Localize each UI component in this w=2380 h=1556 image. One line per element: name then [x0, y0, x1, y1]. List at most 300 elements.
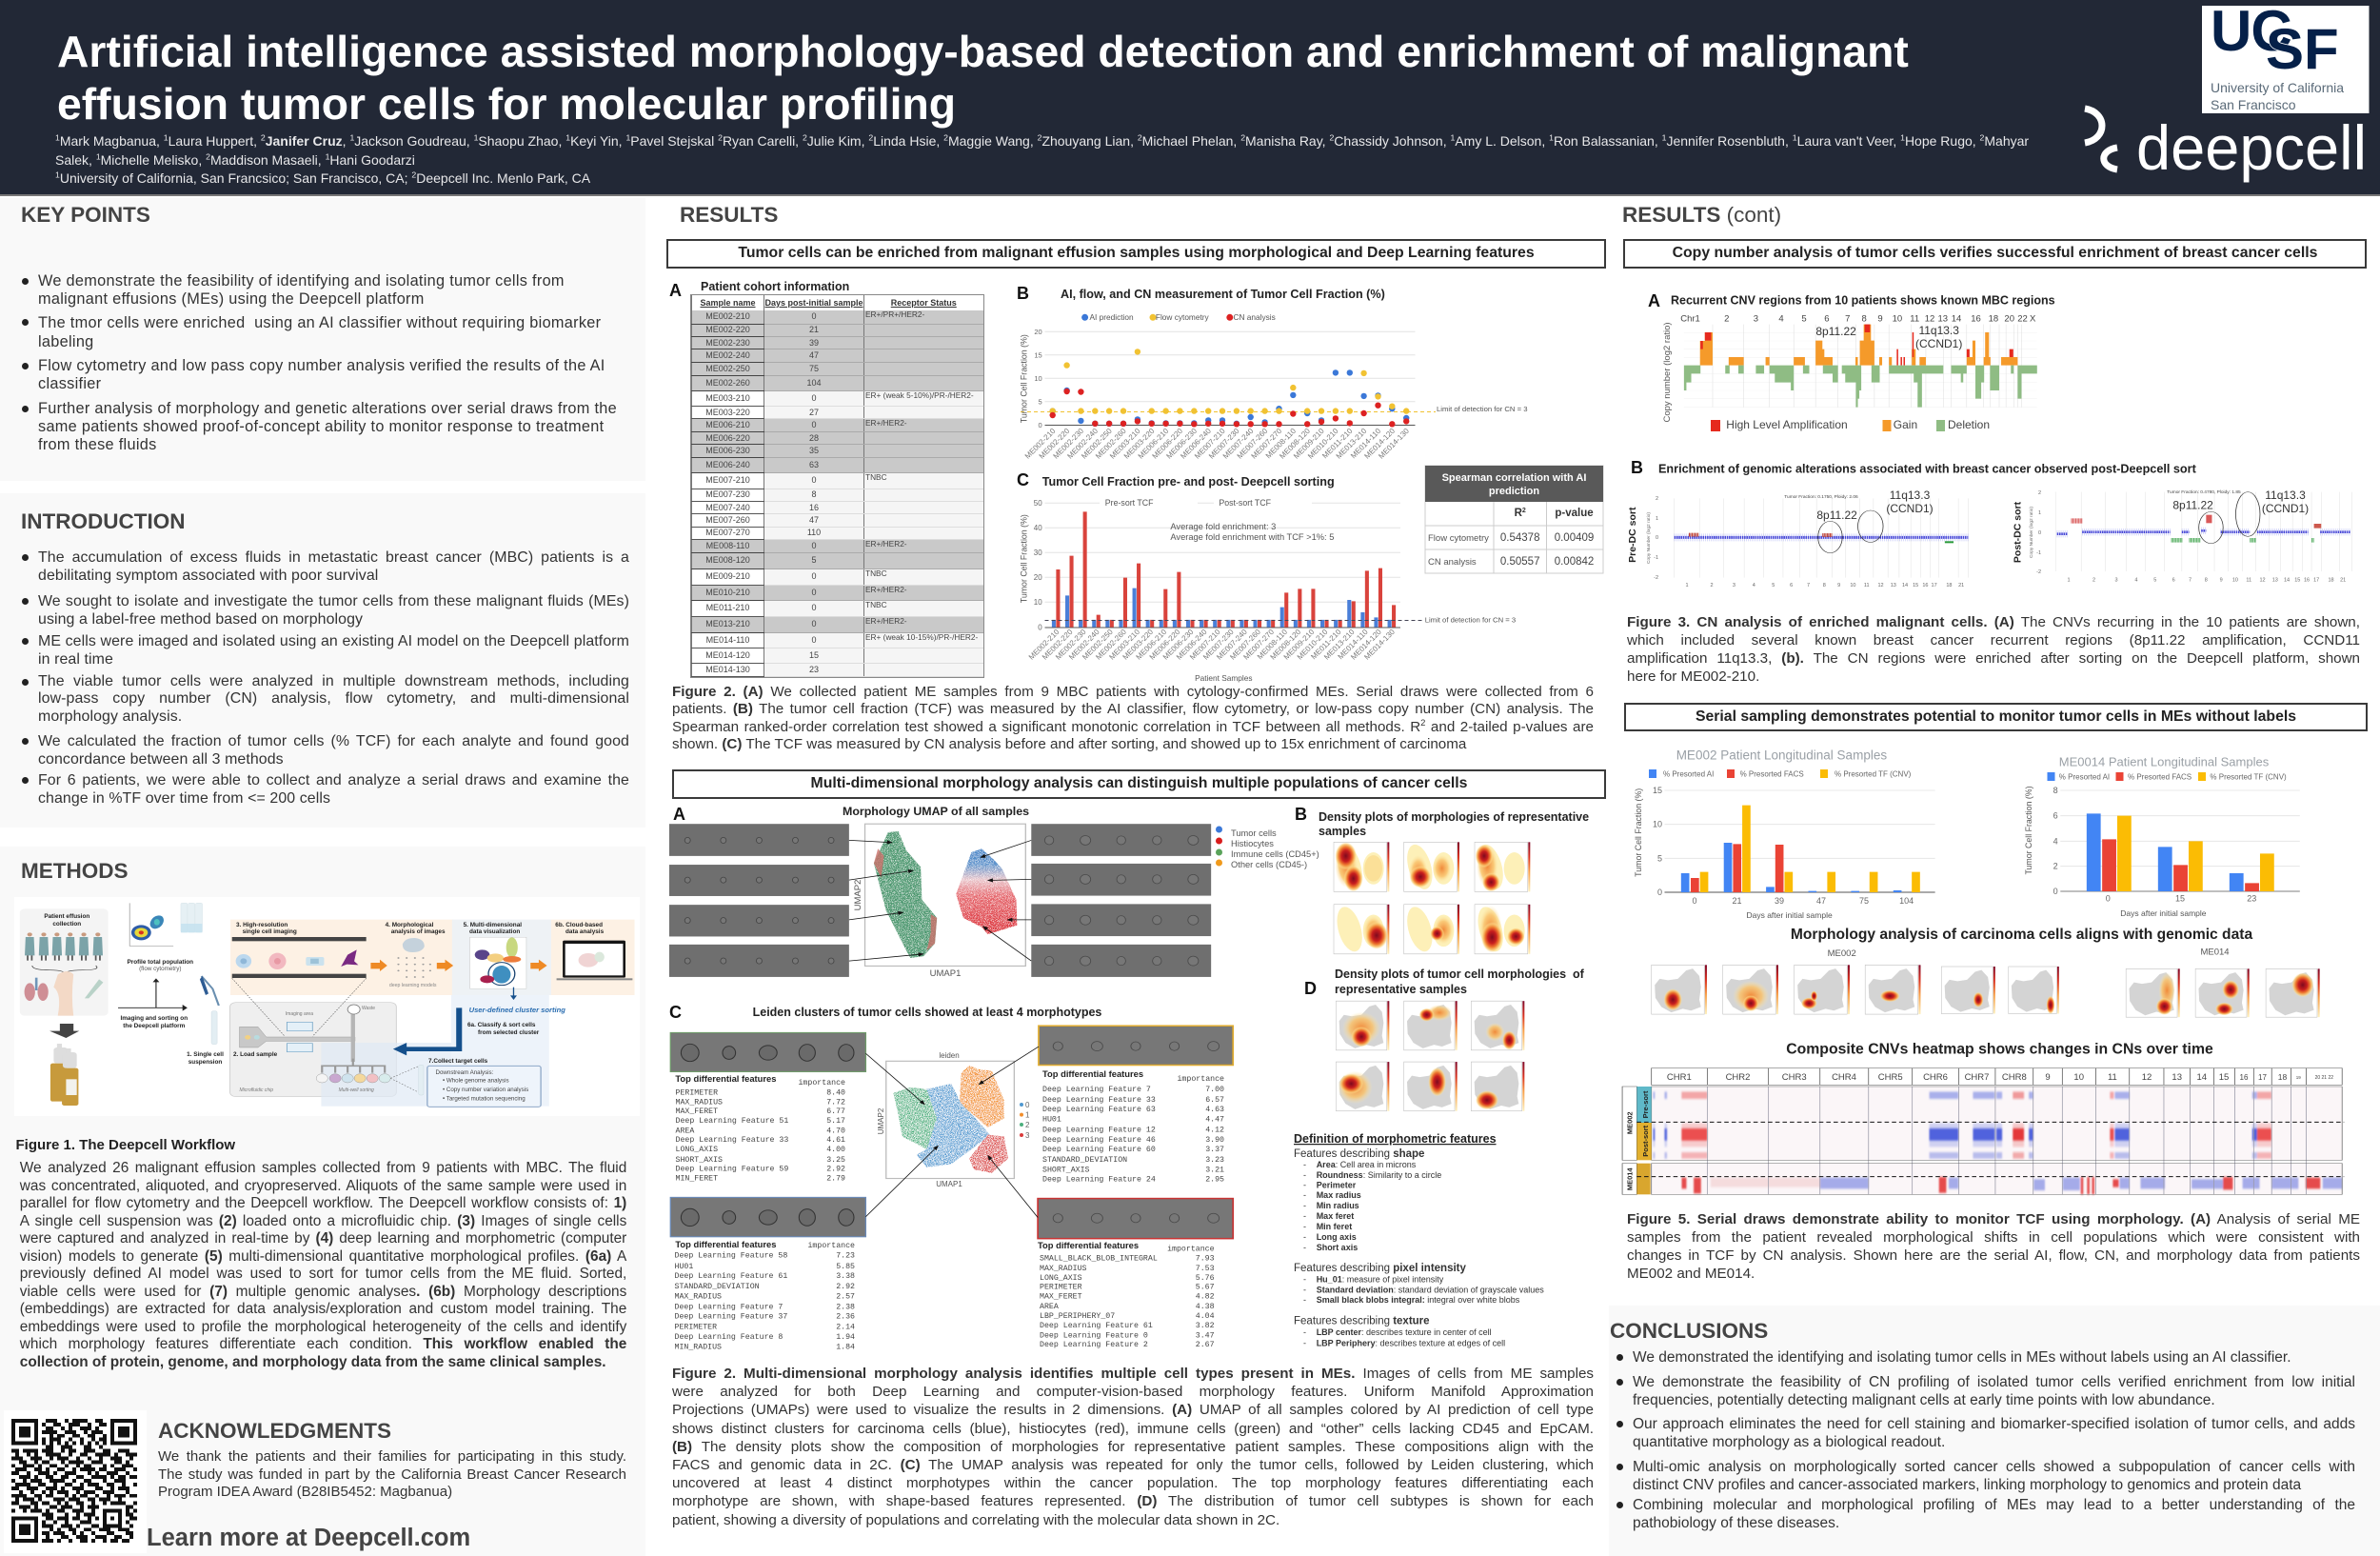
- figure 1: deepcell workflow diagram: 3. High-resolution: [236, 922, 288, 928]
- feature table: yellow morphotype: Deep Learning Feature 63: [1042, 1105, 1156, 1114]
- QR code: [4, 1410, 147, 1553]
- figure 1 caption: We analyzed 26 malignant effusion samples collected from 9 patients with MBC. The fluid: [20, 1160, 626, 1176]
- figure 1: deepcell workflow diagram: analysis of images: [391, 928, 446, 935]
- sample side bars: [1622, 1087, 1652, 1194]
- figure 3-B: pre and post sort copy number plots: [1627, 458, 2351, 588]
- chart: ME002 longitudinal samples: [1634, 748, 1935, 920]
- acknowledgments text: The study was funded in part by the California Breast Cancer Research: [158, 1466, 626, 1482]
- post-DC sort plot: 15: [2294, 577, 2300, 583]
- chart: ME014 longitudinal samples: 2: [2053, 862, 2058, 871]
- table: spearman correlation: Flow cytometry: [1428, 533, 1489, 544]
- heading: methods: METHODS: [21, 859, 128, 883]
- table: patient cohort information: ME003-220: [705, 408, 750, 417]
- chart B: AI, flow and CN scatter: Limit of detection for CN = 3: [1437, 405, 1527, 413]
- chart: ME002 longitudinal samples: 15: [1653, 786, 1662, 795]
- figure 1 caption: parallel for flow cytometry and the Deepcell workflow. The Deepcell workflow consists of: 1): [20, 1195, 626, 1211]
- chart C sample labels: ME002-220: [1041, 628, 1075, 662]
- figure 2-B: density plots of morphologies: Density plots of morphologies of representative: [1319, 810, 1589, 824]
- table: spearman correlation: 0.50557: [1500, 556, 1539, 568]
- heading: results: RESULTS: [680, 203, 778, 227]
- shape features: Min feret: [1317, 1222, 1352, 1231]
- feature table: green morphotype: MAX_RADIUS: [676, 1098, 723, 1107]
- chart C sample labels: ME007-270: [1241, 628, 1276, 662]
- chart B sample labels: ME006-220: [1151, 427, 1185, 461]
- morphology density plots: ME014: ME014: [2200, 947, 2230, 958]
- figure 1: deepcell workflow diagram: • Targeted mutation sequencing: [443, 1095, 526, 1103]
- table: patient cohort information: ME002-240: [705, 350, 750, 360]
- feature table: red morphotype: [1038, 1240, 1215, 1349]
- chromosome labels: Chr1: [1680, 314, 1700, 324]
- figure 1: deepcell workflow diagram: Waste: [362, 1006, 375, 1011]
- chromosome labels: 22: [2017, 314, 2028, 324]
- ME002 legend: % Presorted AI: [1663, 769, 1714, 779]
- table: patient cohort information: ME013-210: [705, 619, 750, 628]
- table: patient cohort information: 0: [811, 475, 817, 485]
- section bar: tumor cell enrichment: [666, 239, 1606, 269]
- chart B sample labels: ME008-120: [1278, 427, 1312, 461]
- chart C: tumor cell fraction pre and post sort: 0: [1038, 623, 1042, 632]
- chromosome labels: 3: [1754, 314, 1758, 324]
- figure 3 caption: which included several known breast cancer recurrent regions (8p11.22 amplification, CCND11: [1627, 632, 2360, 648]
- chart: ME014 longitudinal samples: 6: [2053, 811, 2058, 821]
- chart B sample labels: ME013-210: [1335, 427, 1369, 461]
- key point 1: [38, 272, 638, 309]
- conclusion 2: We demonstrate the feasibility of CN profiling of isolated tumor cells verified enrichment from low initial: [1633, 1373, 2355, 1390]
- post-DC sort plot: 2: [2038, 490, 2041, 496]
- table: patient cohort information: ME002-210: [705, 311, 750, 321]
- legend: cell types: Histiocytes: [1231, 839, 1274, 848]
- pre-DC sort plot: 0: [1656, 535, 1658, 541]
- intro bullet 5: [38, 731, 629, 768]
- feature table: green morphotype: 4.61: [826, 1136, 845, 1145]
- morphology density plots: ME002: ME002: [1828, 948, 1856, 959]
- intro bullet 5: concordance between all 3 methods: [38, 750, 284, 768]
- shape features: -: [1303, 1170, 1306, 1180]
- key point 3: [38, 357, 638, 393]
- table: patient cohort information: ME010-210: [705, 588, 750, 597]
- section bar: tumor cell enrichment: Tumor cells can be enriched from malignant effusion samples using morphological and Deep Learning features: [738, 245, 1535, 261]
- feature table: blue morphotype: [674, 1239, 855, 1352]
- conclusion 3: [1633, 1415, 2355, 1451]
- pre-DC sort plot: 14: [1902, 583, 1908, 588]
- chart: ME002 longitudinal samples: 75: [1859, 896, 1869, 906]
- leiden connector arrows: [865, 1047, 1039, 1217]
- table: patient cohort information: Days post-initial sample: [764, 297, 863, 307]
- figure 2-C: Leiden clusters: Leiden clusters of tumor cells showed at least 4 morphotypes: [753, 1006, 1101, 1019]
- figure 1 caption: collection of protein, genome, and morphology data from the same clinical samples.: [20, 1354, 606, 1369]
- feature table: red morphotype: 4.82: [1196, 1293, 1215, 1302]
- chart B: AI, flow and CN scatter: 5: [1039, 398, 1042, 406]
- feature table: green morphotype: 2.79: [826, 1175, 845, 1183]
- figure 5 caption: changes in TCF by CN analysis. Shown here are the serial AI, flow, CN, and morphology data from patients: [1627, 1247, 2360, 1264]
- feature table: green morphotype: Top differential features: [675, 1073, 776, 1084]
- deletion bars: [1684, 366, 2037, 408]
- chart: ME002 longitudinal samples: Days after initial sample: [1746, 910, 1833, 920]
- feature table: red morphotype: Deep Learning Feature 0: [1040, 1330, 1148, 1340]
- feature table: blue morphotype: Deep Learning Feature 37: [674, 1312, 787, 1322]
- table: patient cohort information: ME007-270: [705, 528, 750, 537]
- chart B sample labels: ME002-220: [1038, 427, 1072, 461]
- chart C: tumor cell fraction pre and post sort: 10: [1034, 598, 1042, 607]
- feature table: green morphotype: Deep Learning Feature 59: [676, 1165, 788, 1174]
- chart B sample labels: ME007-270: [1250, 427, 1284, 461]
- chromosome labels: 5: [1801, 314, 1807, 324]
- pre-DC sort plot: 13: [1891, 583, 1896, 588]
- table: spearman correlation: CN analysis: [1428, 557, 1477, 568]
- pixel intensity features: -: [1303, 1274, 1306, 1284]
- chart C: tumor cell fraction pre and post sort: Average fold enrichment with TCF >1%: 5: [1170, 532, 1334, 542]
- post-DC sort plot: 10: [2232, 577, 2238, 583]
- chart B sample labels: ME009-210: [1292, 427, 1326, 461]
- table: patient cohort information: ME002-230: [705, 338, 750, 348]
- chart: ME014 longitudinal samples: 0: [2053, 887, 2058, 896]
- table: patient cohort information: 47: [809, 515, 819, 525]
- definition of morphometric features: [1294, 1132, 1544, 1348]
- conclusion 5: pathobiology of these diseases.: [1633, 1514, 1839, 1531]
- pre-DC sort plot: 9: [1837, 583, 1840, 588]
- chart C sample labels: ME006-210: [1135, 628, 1169, 662]
- table: patient cohort information: 27: [809, 408, 819, 417]
- feature table: yellow morphotype: Deep Learning Feature 46: [1042, 1135, 1156, 1145]
- feature table: blue morphotype: 2.57: [836, 1293, 855, 1302]
- chromosome labels: 2: [1724, 314, 1729, 324]
- chart C: tumor cell fraction pre and post sort: C: [1017, 470, 1029, 489]
- morphotype strip: yellow: [1039, 1026, 1233, 1066]
- figure 1 caption: viable cells were used for (7) multiple genomic analyses. (6b) Morphology descriptions: [20, 1284, 626, 1299]
- intro bullet 5: We calculated the fraction of tumor cells (% TCF) for each analyte and found good: [38, 733, 629, 748]
- feature table: green morphotype: MIN_FERET: [676, 1175, 718, 1183]
- pixel intensity features: Hu_01: measure of pixel intensity: [1317, 1274, 1444, 1284]
- composite CNV heatmap: 18: [2278, 1072, 2287, 1082]
- chromosome labels: [1680, 314, 2036, 324]
- feature table: yellow morphotype: 3.21: [1205, 1166, 1224, 1175]
- feature table: blue morphotype: Deep Learning Feature 7: [674, 1302, 783, 1311]
- figure 1 title: Figure 1. The Deepcell Workflow: [15, 1137, 235, 1153]
- figure 1: deepcell workflow diagram: Downstream Analysis:: [436, 1069, 494, 1076]
- feature table: yellow morphotype: 3.23: [1205, 1156, 1224, 1165]
- pre-DC sort plot: 15: [1913, 583, 1918, 588]
- table: patient cohort information: 0: [811, 635, 817, 645]
- chart: ME002 longitudinal samples: 39: [1775, 896, 1784, 906]
- ME002 legend: % Presorted TF (CNV): [1835, 769, 1912, 779]
- chart B sample labels: ME002-250: [1080, 427, 1114, 461]
- figure 1 caption: previously defined AI model was used to sort for tumor cells from the ME fluid. Sorted,: [20, 1266, 626, 1282]
- chart C sample labels: ME013-210: [1322, 628, 1357, 662]
- texture features: -: [1303, 1327, 1306, 1337]
- section bar: copy number analysis: Copy number analysis of tumor cells verifies successful enrichment of breast cancer cells: [1673, 245, 2317, 261]
- table: patient cohort information: 0: [811, 393, 817, 403]
- figure 1 caption: were captured and analyzed in real-time by (4) deep learning and morphometric (computer: [20, 1230, 626, 1247]
- post-DC sort plot: Tumor Fraction: 0.4780, Ploidy: 1.85: [2167, 489, 2241, 495]
- multi-dimensional figure caption: Projections (UMAPs) were used to visualize the results in 2 dimensions. (A) UMAP of all samples colored by AI prediction of cell type: [672, 1402, 1594, 1418]
- figure 2 caption: patients. (B) The tumor cell fraction (TCF) was measured by the AI classifier, flow cytometry, or low-pass copy number (CN) analysis. The: [672, 701, 1594, 717]
- chart: ME014 longitudinal samples: 23: [2247, 893, 2256, 903]
- acknowledgments text: [158, 1448, 626, 1500]
- figure 2-C: Leiden clusters: leiden: [939, 1051, 960, 1060]
- leiden legend: 1: [1025, 1110, 1030, 1120]
- table: spearman correlation: Spearman correlation with AI: [1442, 472, 1586, 484]
- shape features: Features describing shape: [1294, 1148, 1424, 1160]
- feature table: red morphotype: MAX_RADIUS: [1040, 1265, 1087, 1273]
- chart C sample labels: ME002-240: [1067, 628, 1101, 662]
- logo: deepcell: deepcell: [2136, 112, 2367, 183]
- table: spearman correlation: 0.54378: [1500, 532, 1539, 544]
- CNV legend: Gain: [1894, 418, 1917, 431]
- shape features: Min radius: [1317, 1201, 1359, 1210]
- figure 2-A: morphology UMAP of all samples: Morphology UMAP of all samples: [843, 805, 1029, 818]
- intro bullet 6: change in %TF over time from <= 200 cells: [38, 790, 330, 806]
- post-DC sort plot: 14: [2284, 577, 2290, 583]
- pixel intensity features: -: [1303, 1286, 1306, 1295]
- table: patient cohort information: ME014-110: [706, 635, 749, 645]
- feature table: red morphotype: 4.38: [1196, 1303, 1215, 1311]
- key point 2: labeling: [38, 333, 94, 350]
- pre-DC sort plot: 8: [1823, 583, 1826, 588]
- pre-DC sort plot: 8p11.22: [1816, 509, 1857, 522]
- figure 2-A: morphology UMAP of all samples: UMAP2: [853, 880, 863, 910]
- table: patient cohort information: 75: [809, 364, 819, 373]
- figure 2A heading: A: [669, 281, 682, 300]
- pre-DC sort plot: 7: [1807, 583, 1810, 588]
- post-DC sort plot: (CCND1): [2262, 502, 2309, 515]
- leiden legend: 2: [1025, 1121, 1030, 1129]
- chart C: tumor cell fraction pre and post sort: 20: [1034, 573, 1042, 582]
- legend: cell types: Other cells (CD45-): [1231, 860, 1307, 869]
- heading: composite CNV heatmap: Composite CNVs heatmap shows changes in CNs over time: [1786, 1042, 2213, 1057]
- chart B sample labels: ME011-210: [1320, 427, 1355, 460]
- table: patient cohort information: ME002-220: [705, 325, 750, 334]
- chromosome labels: 7: [1845, 314, 1850, 324]
- table: patient cohort information: ME007-260: [705, 515, 750, 525]
- feature table: green morphotype: importance: [798, 1078, 845, 1087]
- post-DC sort plot: 4: [2134, 577, 2137, 583]
- pre-DC sort plot: 11: [1864, 583, 1870, 588]
- pre-DC sort plot: 5: [1772, 583, 1775, 588]
- chart B: AI, flow and CN scatter: 10: [1034, 374, 1042, 383]
- figure 1 caption: [19, 1160, 626, 1369]
- pre-DC sort plot: 2: [1656, 496, 1658, 502]
- figure 3-A: recurrent CNV regions: 11q13.3: [1918, 324, 1959, 337]
- figure 1 caption: was concentrated, aliquoted, and cryopreserved. Aliquots of the same sample were used in: [20, 1177, 626, 1194]
- feature table: blue morphotype: 2.14: [836, 1324, 855, 1331]
- shape features: Area: Cell area in microns: [1317, 1160, 1417, 1169]
- shape features: -: [1303, 1181, 1306, 1190]
- composite CNV heatmap: CHR2: [1726, 1072, 1750, 1083]
- chart B sample labels: ME014-130: [1377, 427, 1411, 461]
- chart B sample labels: ME002-210: [1023, 427, 1058, 461]
- table: patient cohort information: ME002-250: [705, 364, 750, 373]
- feature table: yellow morphotype: 7.00: [1205, 1086, 1224, 1094]
- CN analysis points: [1049, 389, 1409, 427]
- composite CNV heatmap: ME014: [1626, 1167, 1634, 1190]
- CNV legend: Deletion: [1948, 418, 1990, 431]
- title: [57, 27, 1909, 129]
- morphotype strip: red: [1038, 1199, 1233, 1239]
- pixel intensity features: Small black blobs integral: integral over white blobs: [1317, 1295, 1520, 1305]
- chart B: AI, flow and CN scatter: 0: [1039, 421, 1042, 429]
- figure 5 caption: ME002 and ME014.: [1627, 1266, 1755, 1282]
- chromosome header row: [1652, 1068, 2342, 1085]
- chromosome labels: 9: [1877, 314, 1883, 324]
- section bar: multi-dimensional morphology: Multi-dimensional morphology analysis can distinguish multiple populations of cancer cells: [811, 775, 1467, 791]
- chart C: tumor cell fraction pre and post sort: 50: [1034, 499, 1042, 508]
- title: Artificial intelligence assisted morphology-based detection and enrichment of malignant: [57, 27, 1909, 76]
- chart: ME014 longitudinal samples: 8: [2053, 786, 2058, 795]
- feature table: red morphotype: MAX_FERET: [1040, 1293, 1082, 1302]
- figure 2 caption: Spearman ranked-order correlation test showed a significant monotonic correlation in TCF between all methods. R2 and 2-tailed p-values are: [672, 716, 1594, 735]
- feature table: blue morphotype: Deep Learning Feature 61: [674, 1271, 787, 1281]
- conclusion 3: quantitative morphology as a biological readout.: [1633, 1434, 1945, 1449]
- feature table: yellow morphotype: STANDARD_DEVIATION: [1042, 1156, 1127, 1165]
- figure 2-C: Leiden clusters: C: [669, 1003, 682, 1022]
- ME002 legend: % Presorted FACS: [1740, 769, 1804, 779]
- feature table: yellow morphotype: [1042, 1068, 1224, 1185]
- shape features: Max feret: [1317, 1211, 1354, 1221]
- post-DC sort plot: 2: [2092, 577, 2095, 583]
- feature table: green morphotype: 8.40: [826, 1089, 845, 1097]
- shape features: -: [1303, 1160, 1306, 1169]
- ME014 legend: % Presorted AI: [2059, 773, 2110, 781]
- right cell image strips: [1031, 824, 1211, 977]
- composite CNV heatmap: CHR4: [1832, 1072, 1856, 1083]
- shape features: -: [1303, 1190, 1306, 1200]
- table: patient cohort information: ME008-110: [706, 541, 749, 550]
- figure 3-A: recurrent CNV regions: A: [1648, 291, 1660, 310]
- feature table: blue morphotype: 7.23: [836, 1252, 855, 1261]
- composite CNV heatmap: [1622, 1068, 2344, 1194]
- chart: ME002 longitudinal samples: 104: [1899, 896, 1914, 906]
- heading: acknowledgments: ACKNOWLEDGMENTS: [158, 1419, 391, 1442]
- shape features: Short axis: [1317, 1243, 1358, 1252]
- feature table: blue morphotype: 1.94: [836, 1333, 855, 1342]
- legend: cell types: Immune cells (CD45+): [1231, 849, 1319, 859]
- feature table: blue morphotype: MIN_RADIUS: [674, 1343, 722, 1352]
- chart C post-sort bars: [1056, 511, 1396, 628]
- title: effusion tumor cells for molecular profiling: [57, 79, 956, 129]
- intro bullet 1: debilitating symptom associated with poor survival: [38, 568, 378, 583]
- figure 2-C: Leiden clusters: UMAP1: [936, 1180, 962, 1188]
- heading: morphology analysis aligns with genomic data: Morphology analysis of carcinoma cells aligns with genomic data: [1791, 927, 2252, 943]
- figure 2-B: density plots of morphologies: samples: [1319, 825, 1366, 838]
- feature table: blue morphotype: HU01: [674, 1263, 693, 1271]
- table: patient cohort information: 0: [811, 603, 817, 612]
- feature table: yellow morphotype: 2.95: [1205, 1176, 1224, 1185]
- gain bars: [1700, 325, 2017, 366]
- chart B sample labels: ME007-240: [1221, 427, 1256, 461]
- chromosome labels: 13: [1938, 314, 1948, 324]
- chart B: AI, flow and CN scatter: B: [1017, 284, 1029, 303]
- figure 1: deepcell workflow diagram: Patient effusion: [44, 913, 89, 920]
- table: patient cohort information: ME006-240: [705, 460, 750, 469]
- pre-DC sort plot: 17: [1932, 583, 1937, 588]
- chart B sample labels: ME006-210: [1137, 427, 1171, 461]
- conclusion 5: [1633, 1495, 2355, 1531]
- feature table: red morphotype: 5.67: [1196, 1284, 1215, 1292]
- texture features: LBP Periphery: describes texture at edges of cell: [1317, 1339, 1505, 1348]
- figure 3-B: pre and post sort copy number plots: B: [1631, 458, 1643, 477]
- pre-DC sort plot: 4: [1753, 583, 1755, 588]
- post-DC sort plot: 6: [2172, 577, 2175, 583]
- table: patient cohort information: ME006-230: [705, 446, 750, 455]
- texture features: LBP center: describes texture in center of cell: [1317, 1327, 1492, 1337]
- composite CNV heatmap: 11: [2108, 1072, 2117, 1083]
- feature table: blue morphotype: importance: [807, 1241, 855, 1250]
- affiliations: 1University of California, San Francsico; San Francisco, CA; 2Deepcell Inc. Menlo Park, CA: [55, 170, 590, 186]
- chromosome labels: 20: [2004, 314, 2014, 324]
- feature table: yellow morphotype: Deep Learning Feature 12: [1042, 1126, 1156, 1135]
- chart B sample labels: ME007-210: [1193, 427, 1227, 461]
- header banner: [0, 0, 2380, 196]
- chart C sample labels: ME006-220: [1148, 628, 1182, 662]
- chart C: tumor cell fraction pre and post sort: 30: [1034, 549, 1042, 557]
- table: patient cohort information: ME006-220: [705, 433, 750, 443]
- intro bullet 4: low-pass copy number (CN) analysis, flow cytometry, and multi-dimensional: [38, 690, 629, 707]
- feature table: blue morphotype: PERIMETER: [674, 1324, 717, 1331]
- multi-dimensional figure caption: uncovered at least 4 distinct morphotypes within the cancer population. The top morphology features differentiating each: [672, 1475, 1594, 1491]
- feature table: yellow morphotype: SHORT_AXIS: [1042, 1166, 1090, 1175]
- post-DC sort plot: 18: [2328, 577, 2334, 583]
- pixel intensity features: [1294, 1263, 1544, 1305]
- intro bullet 4: morphology analysis.: [38, 708, 182, 724]
- conclusion 1: We demonstrated the identifying and isolating tumor cells in MEs without labels using an AI classifier.: [1633, 1348, 2291, 1366]
- chart B sample labels: ME014-110: [1349, 427, 1383, 460]
- composite CNV heatmap: 13: [2172, 1072, 2182, 1083]
- intro bullet 3: in real time: [38, 651, 113, 667]
- figure 1: deepcell workflow diagram: 6a. Classify & sort cells: [467, 1022, 536, 1028]
- figure 1: deepcell workflow diagram: User-defined cluster sorting: [469, 1006, 565, 1014]
- chart B sample labels: ME006-240: [1179, 427, 1213, 461]
- figure 2-D: density plots of tumor cell morphologies: Density plots of tumor cell morphologies of: [1335, 968, 1585, 981]
- heading: key points: KEY POINTS: [21, 203, 150, 227]
- chart B sample labels: ME014-120: [1362, 427, 1397, 461]
- table: patient cohort information: 28: [809, 433, 819, 443]
- shape features: -: [1303, 1243, 1306, 1252]
- figure 2A heading: Patient cohort information: [701, 280, 849, 293]
- feature table: green morphotype: 5.17: [826, 1117, 845, 1126]
- figure 2 caption: [672, 684, 1594, 752]
- chart: ME002 longitudinal samples: Tumor Cell Fraction (%): [1634, 788, 1643, 877]
- figure 1: deepcell workflow diagram: from selected cluster: [478, 1029, 540, 1036]
- table: patient cohort information: ME007-230: [705, 489, 750, 499]
- composite CNV heatmap: CHR8: [2002, 1072, 2027, 1083]
- composite CNV heatmap: 15: [2219, 1072, 2229, 1083]
- logo: UCSF: UC: [2211, 0, 2291, 63]
- post-DC sort plot: -2: [2036, 569, 2041, 575]
- figure 2-C: Leiden clusters: [669, 1003, 1233, 1352]
- pre-DC sort plot: -1: [1654, 555, 1658, 561]
- table: patient cohort information: ME009-210: [705, 571, 750, 581]
- pre-DC sort plot: -2: [1654, 575, 1658, 581]
- chart C sample labels: ME008-110: [1256, 628, 1290, 661]
- pixel intensity features: Standard deviation: standard deviation of grayscale values: [1317, 1286, 1544, 1295]
- feature table: green morphotype: 7.72: [826, 1098, 845, 1107]
- CNV legend: [1711, 418, 1990, 431]
- figure 3 caption: [1627, 614, 2360, 685]
- chart: ME002 longitudinal samples: 10: [1653, 820, 1662, 829]
- intro bullet 2: [38, 592, 629, 628]
- chart C: tumor cell fraction pre and post sort: Tumor Cell Fraction pre- and post- Deepcell sorting: [1042, 475, 1335, 489]
- chromosome labels: 11: [1910, 314, 1919, 324]
- pre-DC sort plot: 6: [1790, 583, 1793, 588]
- feature table: red morphotype: LONG_AXIS: [1040, 1274, 1082, 1283]
- multi-dimensional figure caption: (B) The density plots show the composition of morphologies for representative patient samples. These compositions align with the: [672, 1439, 1594, 1455]
- post-DC sort plot: 1: [2038, 510, 2041, 516]
- feature table: blue morphotype: 5.85: [836, 1263, 855, 1271]
- texture features: Features describing texture: [1294, 1316, 1430, 1327]
- chart C sample labels: ME007-210: [1188, 628, 1222, 662]
- pre-DC sort plot: 1: [1685, 583, 1689, 588]
- multi-dimensional figure caption: FACS and genomic data in 2C. (C) The UMAP analysis was repeated for only the tumor cells, followed by Leiden clustering, which: [672, 1457, 1594, 1473]
